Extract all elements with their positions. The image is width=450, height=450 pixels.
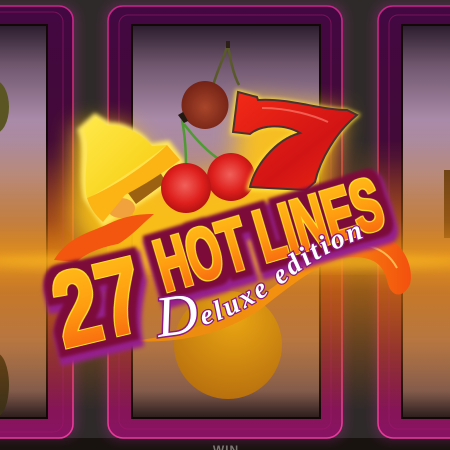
reel symbol: right fruit edge <box>444 170 450 238</box>
right reel <box>374 3 450 441</box>
subtitle: Deluxe edition: D <box>151 280 202 350</box>
subtitle: Deluxe edition: eluxe edition <box>200 225 364 326</box>
lower round fruit <box>174 291 282 399</box>
orange glow band <box>0 140 450 410</box>
orange swoosh <box>130 239 411 342</box>
centre reel <box>104 3 346 441</box>
reel symbol: left green fruit <box>0 80 9 134</box>
left reel <box>0 5 78 439</box>
symbol glow <box>70 100 345 265</box>
title: 27: 27 <box>42 235 155 370</box>
icon: red seven <box>232 91 358 192</box>
icon: dark cherries <box>182 41 239 129</box>
title flame <box>54 214 154 262</box>
icon: golden bell <box>80 116 182 224</box>
icon: bright cherries <box>161 112 255 213</box>
reel symbol: left lower fruit <box>0 353 9 417</box>
subtitle: Deluxe edition <box>151 225 364 350</box>
central horizontal flare <box>0 254 450 270</box>
swoosh highlight <box>345 245 397 268</box>
